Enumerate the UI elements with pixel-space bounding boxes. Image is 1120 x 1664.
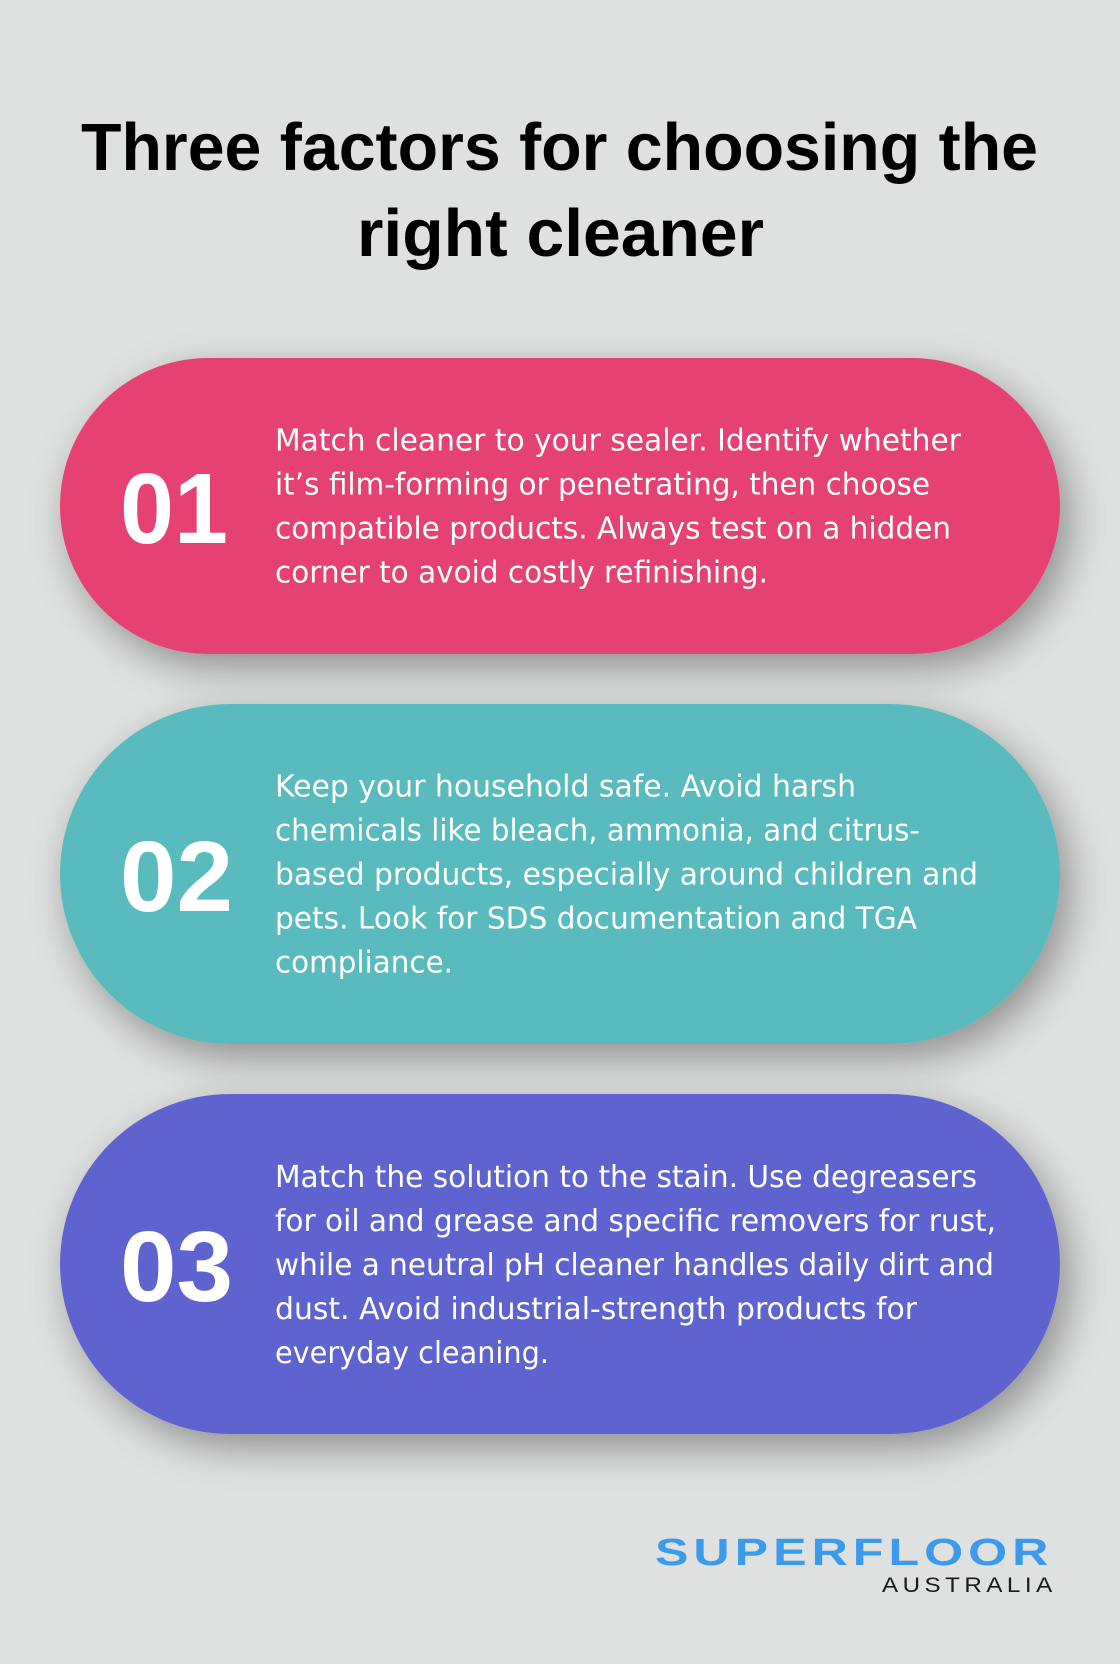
text block 01: corner to avoid costly refinishing. [275, 556, 768, 590]
logo: Superfloor Australia: AUSTRALIA [882, 1573, 1053, 1597]
text block 02: chemicals like bleach, ammonia, and citrus- [275, 814, 920, 848]
text block 02: pets. Look for SDS documentation and TGA [275, 902, 917, 936]
text block 03: for oil and grease and specific removers for rust, [275, 1204, 996, 1239]
title [81, 110, 1038, 271]
text block 03: while a neutral pH cleaner handles daily dirt and [275, 1248, 994, 1283]
title: right cleaner [357, 196, 764, 271]
text block 01: Match cleaner to your sealer. Identify whether [275, 424, 962, 458]
text block 01: it’s film-forming or penetrating, then choose [275, 468, 930, 502]
text block 03 [275, 1160, 996, 1371]
text block 01: compatible products. Always test on a hidden [275, 512, 951, 546]
text block 03: dust. Avoid industrial-strength products for [275, 1292, 918, 1327]
logo: Superfloor Australia: SUPERFLOOR [655, 1532, 1048, 1574]
text block 02: Keep your household safe. Avoid harsh [275, 770, 856, 804]
text block 03: everyday cleaning. [275, 1336, 549, 1371]
pill background 01 [60, 358, 1060, 654]
panel: factor 03 [60, 1094, 1060, 1434]
panel: factor 01 [60, 358, 1060, 654]
text block 02: compliance. [275, 946, 453, 980]
text block 01 [275, 424, 962, 590]
text block 03: Match the solution to the stain. Use degreasers [275, 1160, 977, 1195]
panel: factor 02 [60, 704, 1060, 1044]
text block 02: based products, especially around children and [275, 858, 978, 892]
logo: Superfloor Australia [655, 1532, 1053, 1597]
number 02: 02 [120, 821, 233, 933]
pill background 02 [60, 704, 1060, 1044]
number 03: 03 [120, 1211, 233, 1323]
title: Three factors for choosing the [81, 110, 1038, 185]
text block 02 [275, 770, 978, 980]
pill background 03 [60, 1094, 1060, 1434]
number 01: 01 [120, 453, 228, 565]
